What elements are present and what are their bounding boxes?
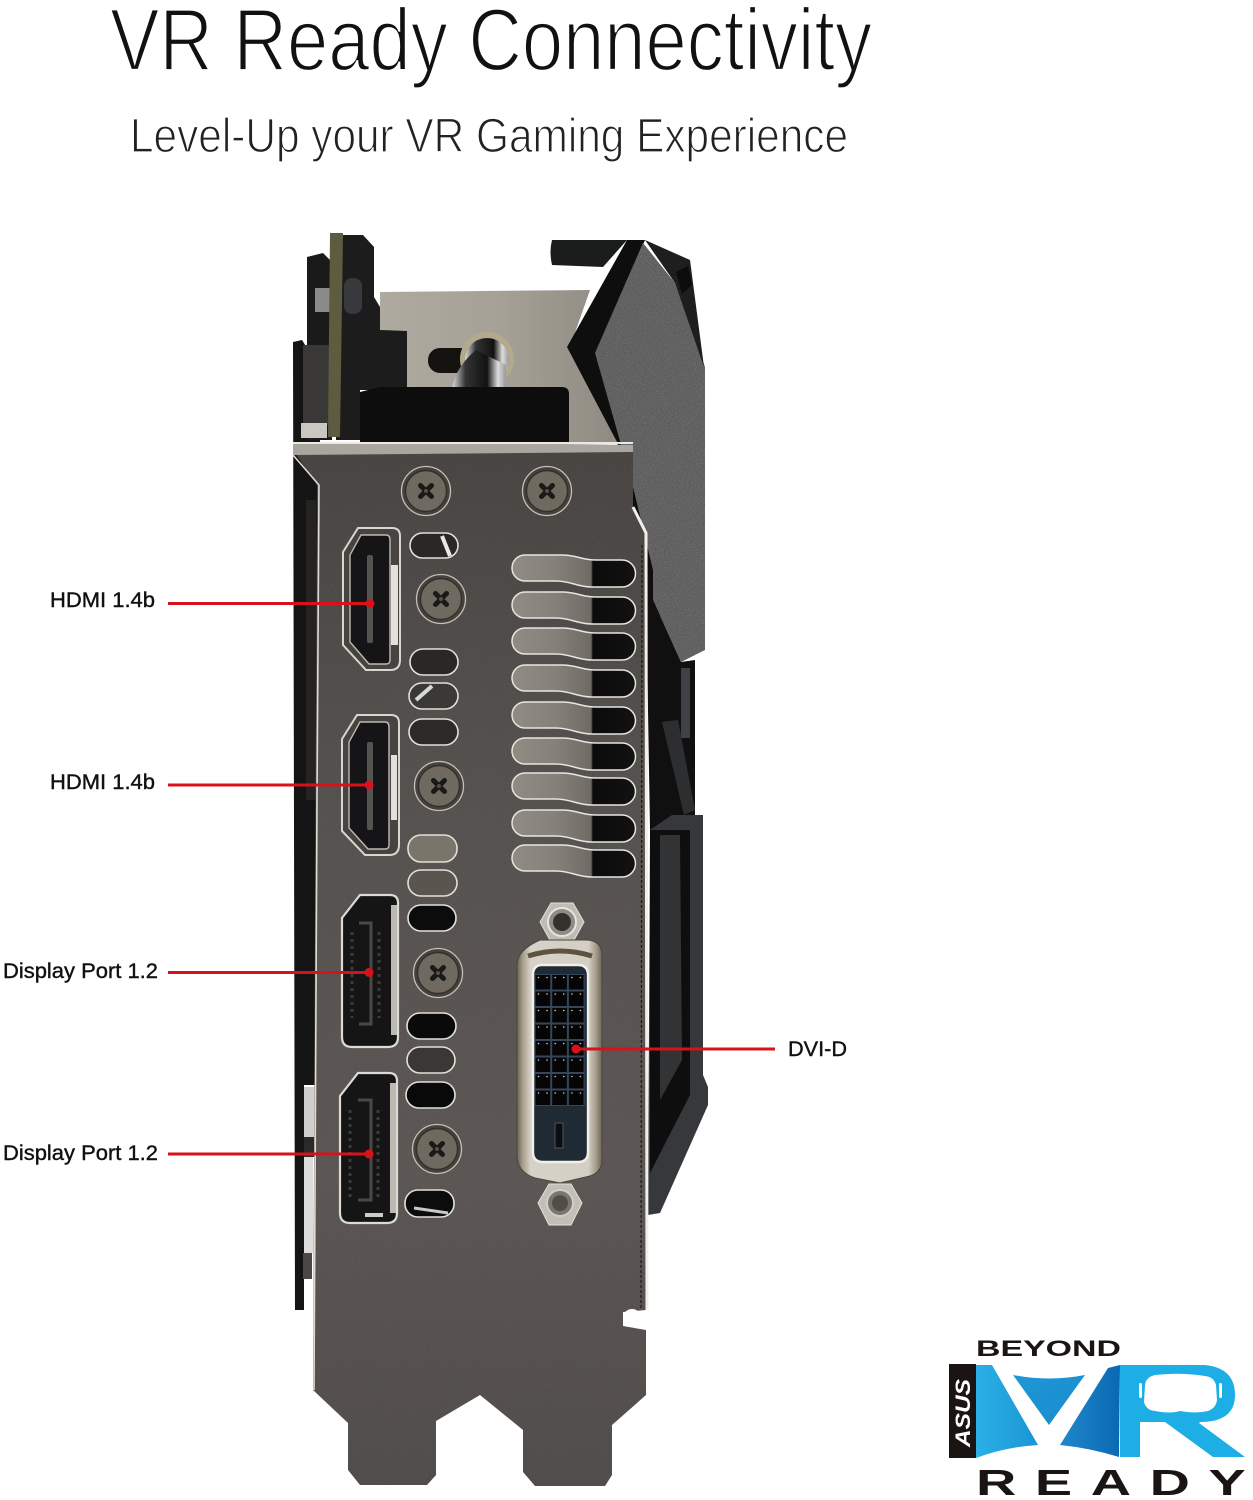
callout: Display Port 1.2: Display Port 1.2 [3, 959, 158, 983]
DisplayPort 1 [342, 895, 398, 1047]
bottom hex nut [538, 1184, 582, 1225]
key slot [555, 1123, 563, 1148]
callout: DVI-D: DVI-D [788, 1037, 847, 1061]
top right screw [522, 466, 572, 516]
logo: ASUS Beyond VR Ready [949, 1336, 1246, 1500]
fan hub highlight [344, 278, 362, 314]
V centre triangle [1013, 1375, 1085, 1425]
DisplayPort screw 1 [414, 948, 462, 998]
right shroud middle section [645, 530, 695, 830]
metal shell [517, 940, 602, 1183]
callout: Display Port 1.2 second: Display Port 1.2 [3, 1141, 158, 1165]
DVI-D port [517, 903, 602, 1225]
callout: HDMI 1.4b [50, 588, 374, 612]
black connector block [360, 387, 569, 442]
HDMI port 1 [343, 528, 400, 670]
right shroud textured panel [595, 240, 705, 662]
callout: HDMI 1.4b second [50, 770, 374, 794]
DisplayPort screw 2 [412, 1124, 462, 1174]
HDMI port 2 [342, 715, 399, 855]
pin grid [534, 974, 585, 1106]
HDMI screw 1 [416, 574, 466, 624]
callout: Display Port 1.2 second [3, 1141, 374, 1165]
callout: HDMI 1.4b second: HDMI 1.4b [50, 770, 155, 794]
top left screw [402, 466, 450, 516]
HDMI screw 2 [414, 762, 464, 810]
callout: Display Port 1.2 [3, 959, 374, 983]
visor side tabs [1139, 1383, 1222, 1398]
ASUS black tab: ASUS [952, 1379, 975, 1448]
R letter with headset visor [1120, 1365, 1245, 1457]
right shroud lower section [648, 815, 708, 1215]
small vent slots [405, 533, 458, 1217]
V left wedge [976, 1365, 1038, 1458]
right shroud black border [567, 240, 660, 660]
right shroud arm [550, 240, 627, 267]
logo text: BEYOND: BEYOND [976, 1336, 1121, 1361]
DisplayPort 2 [340, 1073, 397, 1223]
silver heatsink plate [380, 290, 617, 442]
callout: DVI-D [572, 1037, 847, 1061]
callout: HDMI 1.4b: HDMI 1.4b [50, 588, 155, 612]
black fan shroud, upper left [336, 235, 407, 440]
subtitle: Level-Up your VR Gaming Experience [130, 110, 848, 163]
large wavy vent slots [512, 555, 636, 877]
green PCB edge [328, 233, 343, 437]
top hex nut [540, 903, 584, 942]
metal bracket plate [290, 440, 650, 1490]
heat pipe [428, 332, 514, 388]
left rear black strip [293, 340, 320, 1310]
connector body [533, 965, 588, 1162]
graphics card bracket photo [290, 233, 710, 1490]
ASUS black tab [949, 1364, 976, 1458]
rear PCB bracket, upper left [301, 253, 332, 440]
V right wedge [1060, 1365, 1120, 1457]
